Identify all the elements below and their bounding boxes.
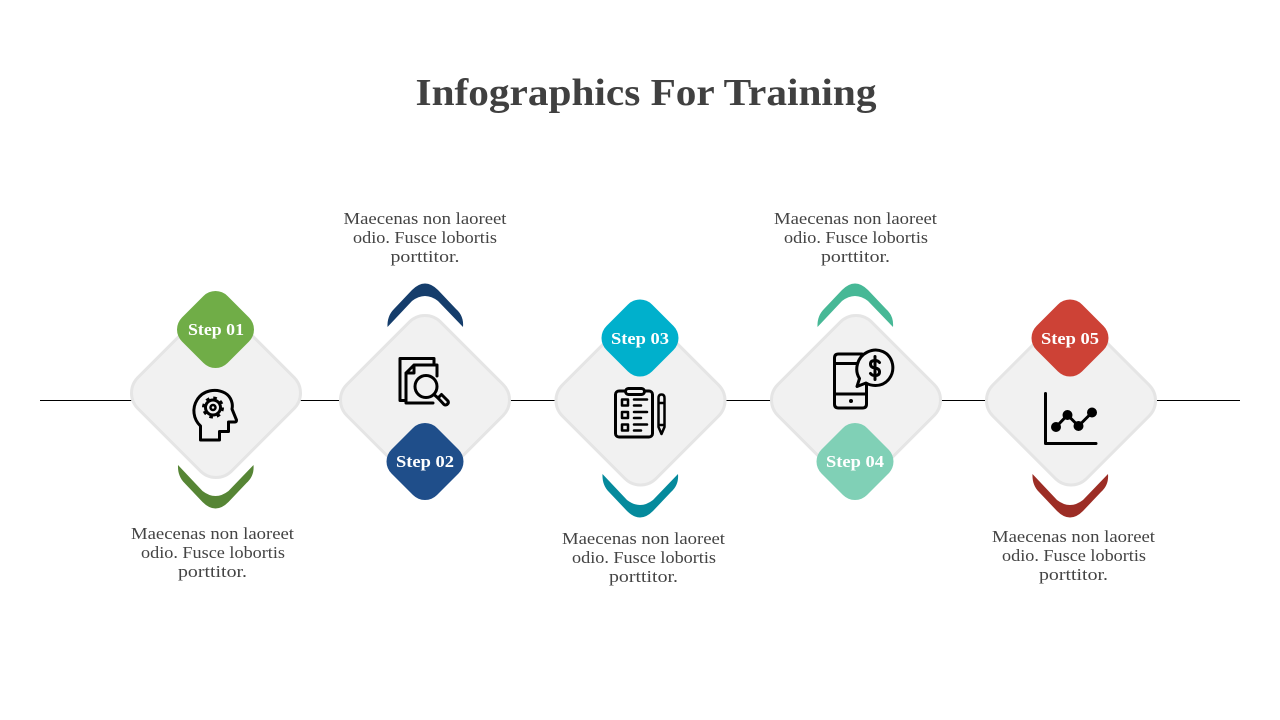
- badge: step 02: [379, 416, 471, 507]
- timeline line: [40, 400, 1240, 402]
- badge: step 04: Step 04: [826, 452, 885, 471]
- chevron: step 03: [602, 474, 678, 518]
- panel: step 05 diamond: [977, 307, 1165, 494]
- text: step 04: porttitor.: [821, 247, 890, 266]
- text: step 05: Maecenas non laoreet: [992, 527, 1155, 546]
- text: step 04: [774, 209, 937, 266]
- text: step 01: Maecenas non laoreet: [131, 524, 294, 543]
- badge: step 05: [1024, 292, 1116, 384]
- text: step 05: odio. Fusce lobortis: [1002, 546, 1146, 565]
- step 05 group: [977, 292, 1165, 584]
- badge: step 02: Step 02: [396, 452, 454, 471]
- text: step 01: [131, 524, 294, 581]
- text: step 01: porttitor.: [178, 562, 247, 581]
- badge: step 03: Step 03: [611, 329, 669, 348]
- title: Infographics For Training: [416, 72, 876, 114]
- badge: step 04: [809, 416, 901, 507]
- chevron: step 02: [387, 284, 463, 327]
- text: step 03: [562, 529, 725, 586]
- text: step 05: [992, 527, 1155, 584]
- icon: documents with magnifier: [400, 358, 448, 405]
- text: step 01: odio. Fusce lobortis: [141, 543, 285, 562]
- panel: step 01 diamond: [122, 299, 310, 487]
- step 03 group: [547, 292, 734, 586]
- text: step 02: odio. Fusce lobortis: [353, 228, 497, 247]
- badge: step 01: [170, 284, 261, 375]
- badge: step 03: [594, 292, 686, 384]
- chevron: step 04: [817, 284, 893, 327]
- panel: step 03 diamond: [547, 307, 734, 494]
- text: step 04: odio. Fusce lobortis: [784, 228, 928, 247]
- text: step 02: Maecenas non laoreet: [344, 209, 507, 228]
- panel: step 02 diamond: [331, 306, 519, 494]
- text: step 03: Maecenas non laoreet: [562, 529, 725, 548]
- badge: step 01: Step 01: [188, 320, 244, 339]
- icon: line chart: [1046, 394, 1096, 444]
- text: step 04: Maecenas non laoreet: [774, 209, 937, 228]
- icon: head with gear: [194, 390, 236, 440]
- step 02 group: [331, 209, 519, 507]
- chevron: step 01: [178, 465, 254, 508]
- text: step 03: odio. Fusce lobortis: [572, 548, 716, 567]
- step 01 group: [122, 284, 310, 581]
- icon: phone with dollar bubble: [834, 350, 893, 408]
- chevron: step 05: [1032, 474, 1108, 518]
- icon: clipboard and pencil: [616, 388, 664, 437]
- badge: step 05: Step 05: [1041, 329, 1099, 348]
- text: step 05: porttitor.: [1039, 565, 1108, 584]
- panel: step 04 diamond: [762, 306, 950, 494]
- step 04 group: [762, 209, 950, 507]
- text: step 02: porttitor.: [390, 247, 460, 266]
- text: step 02: [344, 209, 507, 266]
- text: step 03: porttitor.: [609, 567, 678, 586]
